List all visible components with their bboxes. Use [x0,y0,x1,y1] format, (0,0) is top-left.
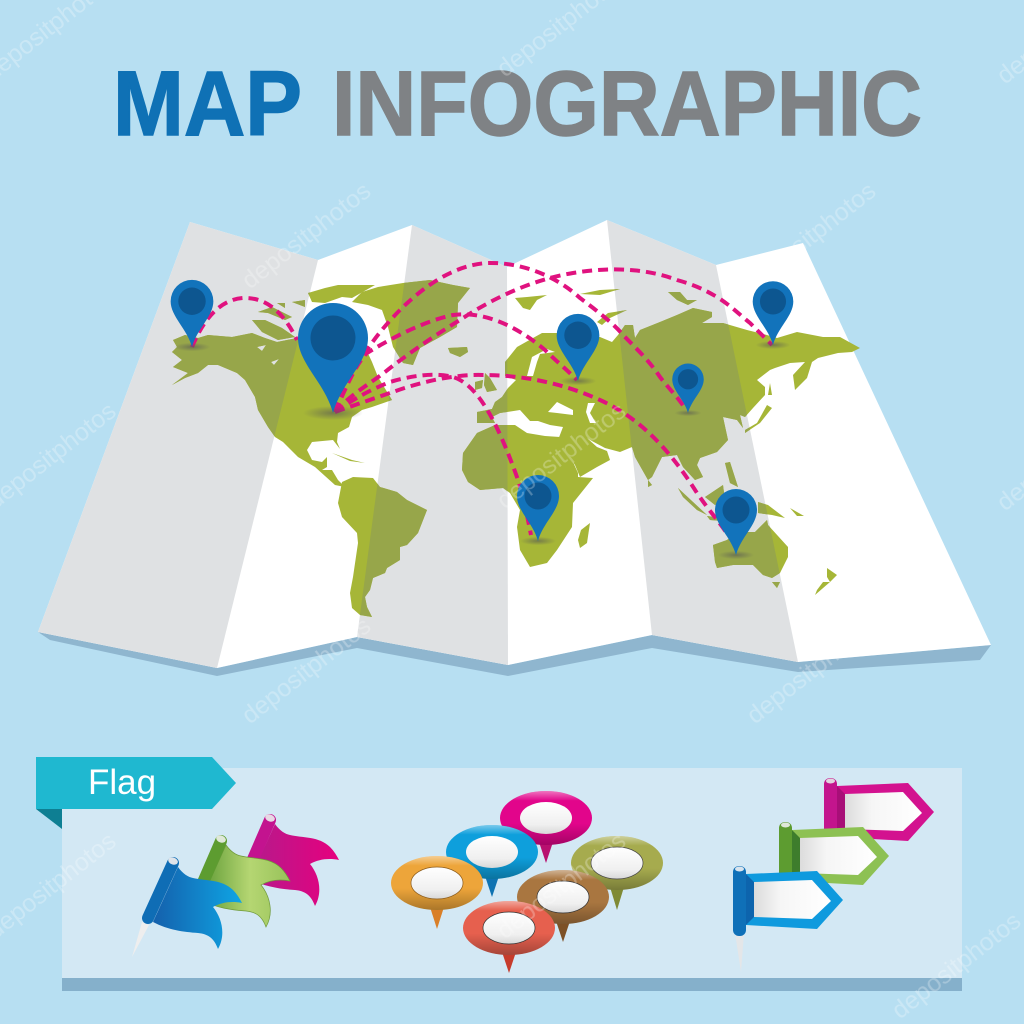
bubble: olive [571,836,663,910]
arc to east Russia [335,269,772,412]
Greenland [352,280,470,365]
watermarks: depositphotos [236,612,376,730]
pin: Europe [557,314,599,385]
speech bubble pins [391,791,663,973]
pin: Australia [715,489,757,559]
flag: magenta [247,813,339,906]
folded world map [38,220,991,676]
flag: green [198,834,290,927]
sign: green [779,822,889,892]
ribbon [36,757,236,809]
map sheet [38,220,991,668]
panel bottom strip [62,978,962,991]
pin: east Russia [753,281,793,349]
flag: blue [132,856,242,957]
panel fold 3 [357,225,508,665]
panel: flag collection [36,757,962,991]
arc to central Asia [335,263,686,412]
bubble: orange [391,856,483,929]
title [113,53,922,155]
ribbon label: Flag [88,763,156,802]
Australia [713,520,788,578]
watermarks: depositphotos [741,177,881,295]
Arctic islands of Eurasia [515,289,697,325]
sign: magenta [824,778,934,848]
pin: Africa [517,475,559,545]
Eurasia [477,308,860,480]
arc to Alaska [192,298,297,347]
arc to Africa [335,375,531,535]
South America [338,477,427,617]
Tasmania [772,582,780,588]
map shadow [38,632,991,676]
arc to Europe [335,314,577,412]
Africa [462,425,593,567]
Sri Lanka and SE Asia [648,462,738,521]
continents [172,280,860,617]
watermarks: depositphotos [491,827,631,945]
waving flags [132,813,339,957]
bubble: red [463,901,555,973]
fold panels [38,220,798,668]
title word: INFOGRAPHIC: INFOGRAPHIC [332,53,922,155]
Canadian arctic islands [252,285,375,340]
ribbon fold [36,809,62,829]
bubble: blue [446,825,538,897]
sign: blue [733,866,843,972]
bubble: brown [517,870,609,942]
Iceland [448,347,468,357]
arrow sign flags [733,778,934,972]
bubble: magenta [500,791,592,863]
Madagascar [578,523,590,548]
pin: central Asia [672,364,704,416]
panel fold 1 [38,222,318,668]
New Zealand [815,568,837,595]
Caribbean [332,453,365,463]
map pins [171,280,793,559]
panel background [62,768,962,979]
flight route arcs [192,263,772,535]
watermarks: depositphotos [741,612,881,730]
title word: MAP: MAP [113,53,302,155]
pin: North America large [298,303,368,420]
continents shaded on grey folds [172,280,780,617]
UK and Ireland [475,373,497,392]
watermarks: depositphotos [236,177,376,295]
panel fold 5 [607,220,798,662]
watermarks: depositphotos [886,907,1024,1024]
Japan [745,383,772,433]
watermarks: depositphotos [491,397,631,515]
North America [172,330,392,487]
pin: Alaska [171,280,213,351]
New Guinea [758,502,804,518]
arc to Australia [335,375,728,535]
